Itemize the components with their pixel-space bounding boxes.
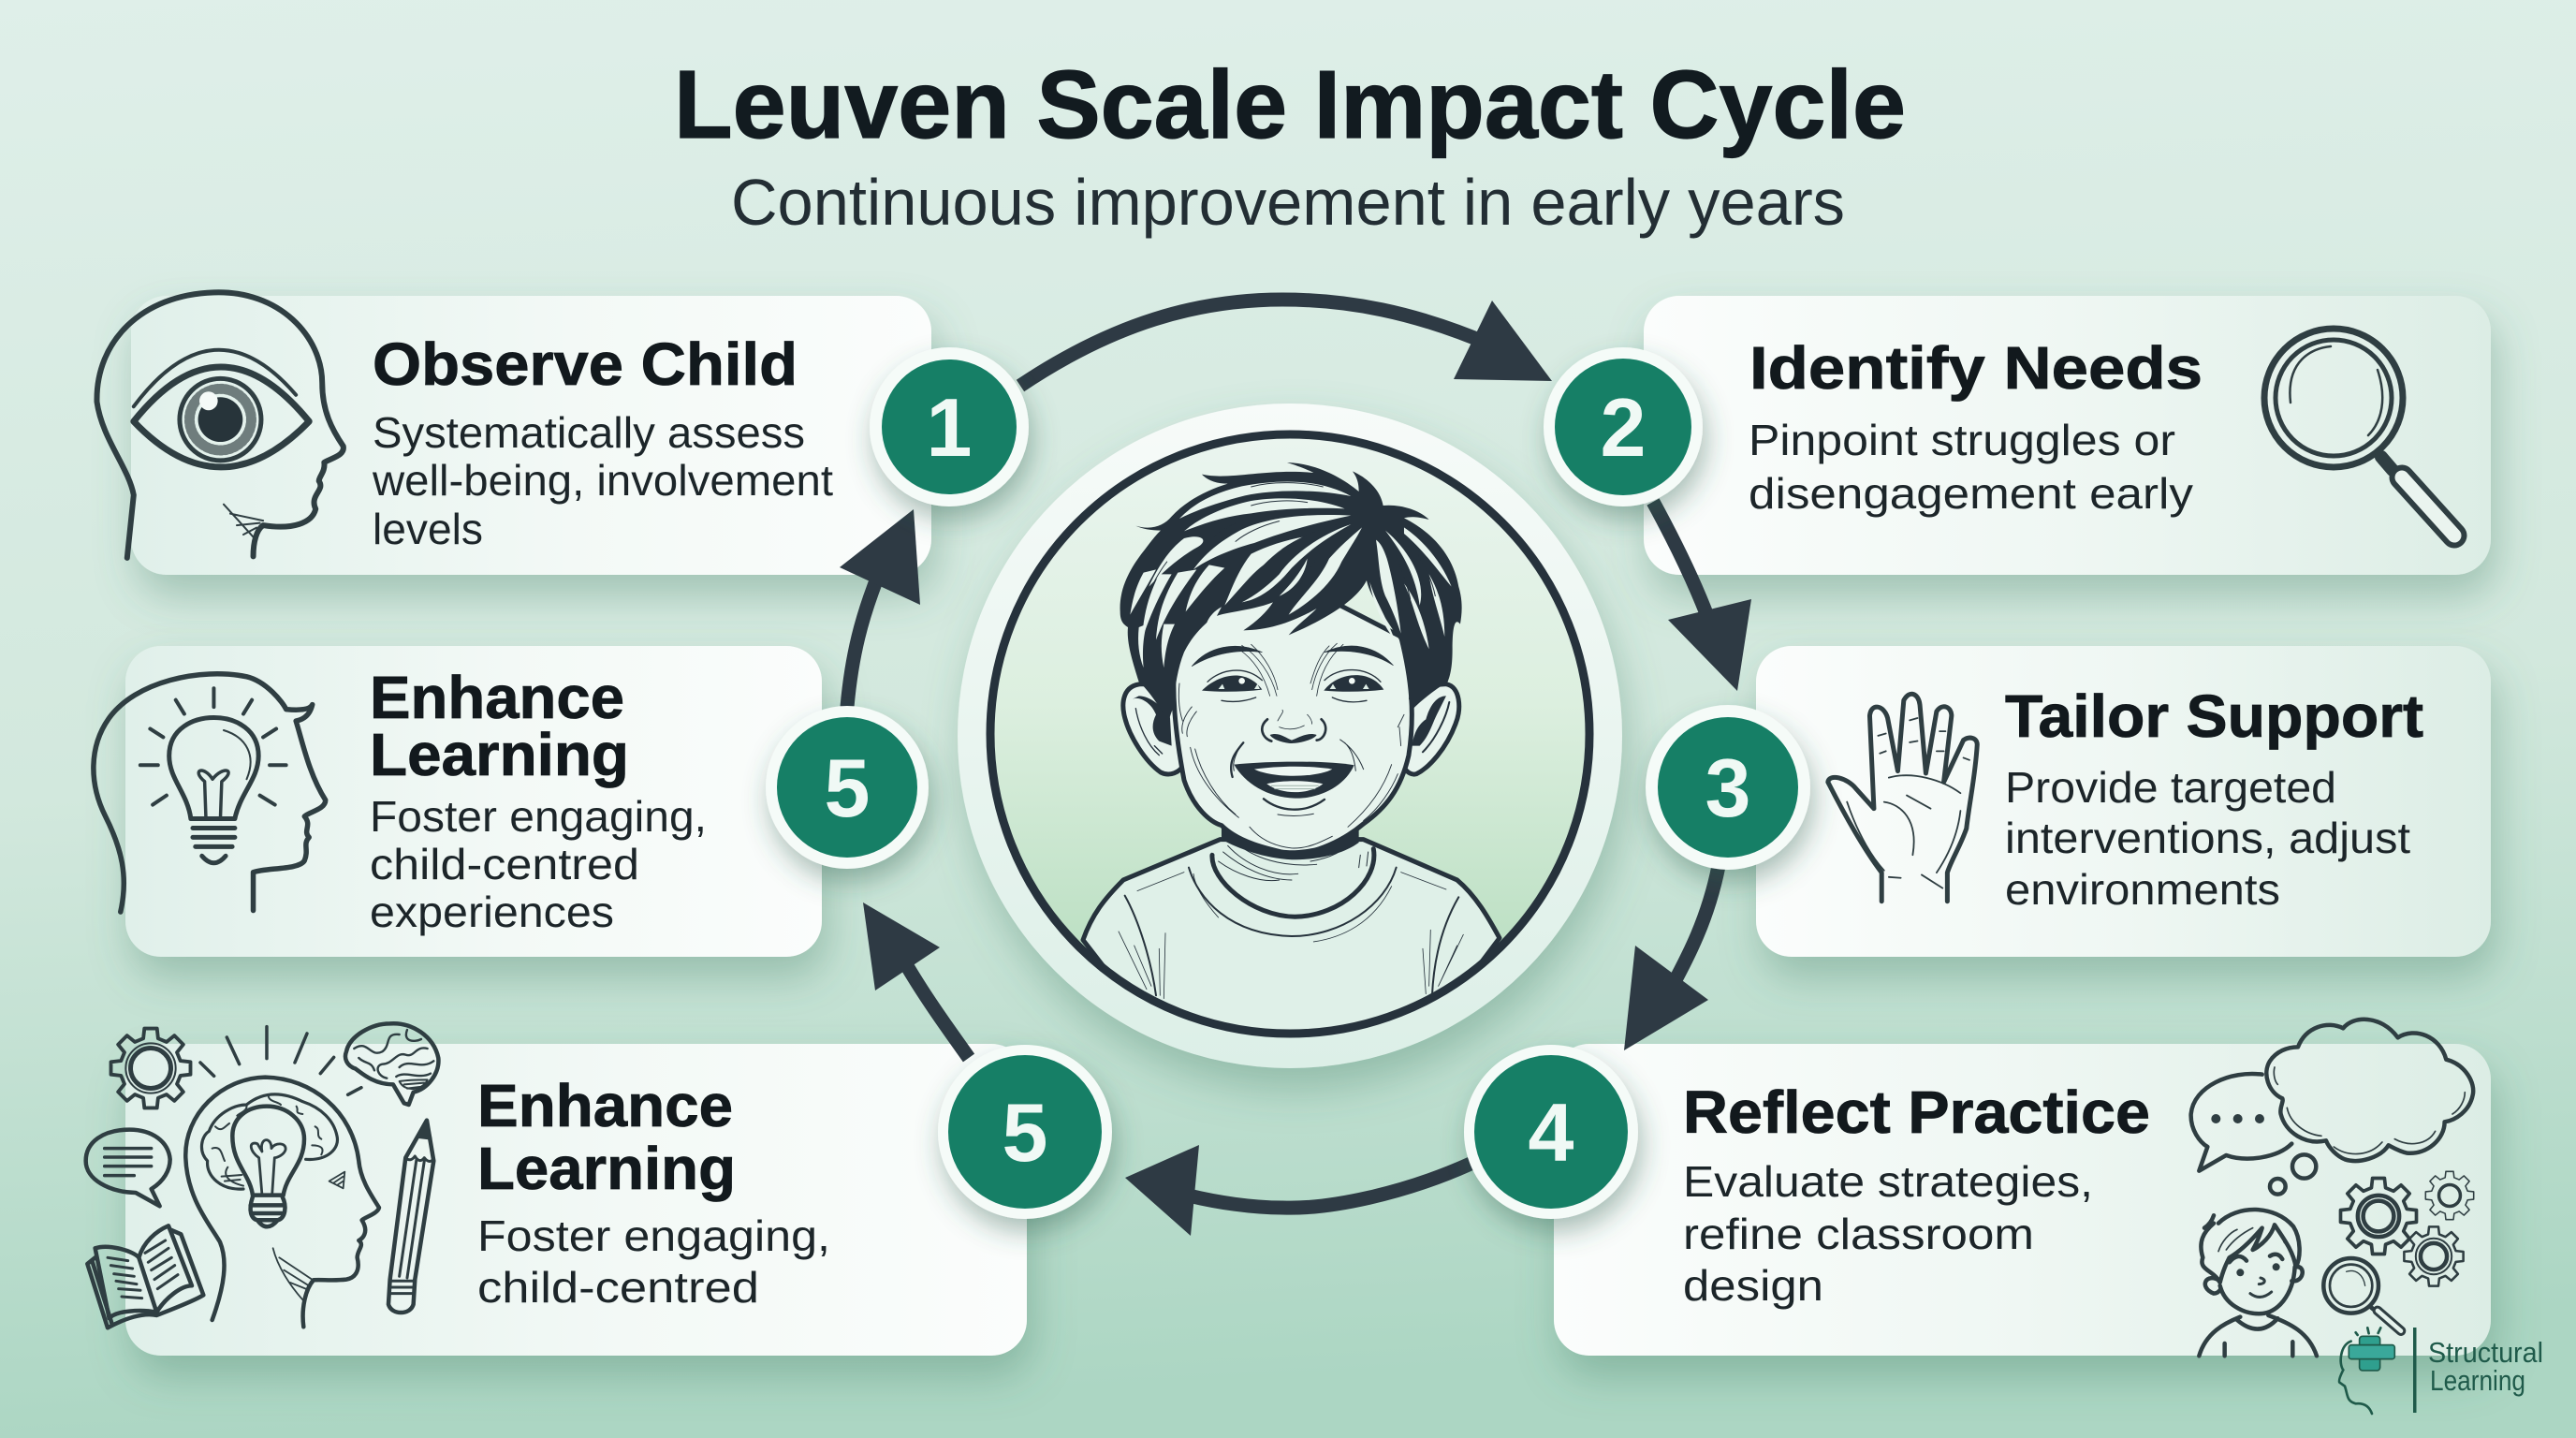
icon: thought cloud [2266, 1020, 2473, 1161]
panel: observe child [96, 292, 931, 575]
body: identify needs [1749, 416, 2193, 518]
body: identify needs: Pinpoint struggles or [1749, 416, 2175, 464]
heading: enhance learning: Enhance [370, 664, 624, 731]
badge 5 lower: 5 [1003, 1086, 1047, 1179]
icon: speech bubble [86, 1130, 170, 1206]
icon: pencil [388, 1121, 433, 1313]
body: observe child: levels [373, 505, 483, 553]
arrow: lower 5 to upper 5 [863, 902, 969, 1058]
badge 5 lower [938, 1045, 1112, 1219]
hair [1120, 462, 1462, 724]
icon: gear [111, 1029, 190, 1108]
body: enhance learning [370, 792, 707, 936]
body: enhance learning: child-centred [370, 840, 639, 888]
panel: enhance learning lower [86, 1023, 1027, 1356]
icon: bulb [232, 1107, 304, 1196]
icon: light rays [200, 1027, 361, 1094]
illustration: smiling child [1083, 462, 1500, 1049]
body: reflect practice [1683, 1157, 2093, 1310]
logo mark [2339, 1328, 2394, 1414]
body: identify needs: disengagement early [1749, 469, 2193, 518]
hair highlights [1130, 481, 1452, 668]
heading: enhance learning lower: Learning [477, 1135, 736, 1202]
panel: enhance learning upper [94, 646, 822, 957]
logo text: Structural [2428, 1336, 2543, 1369]
icon: open book [95, 1225, 192, 1318]
heading: observe child: Observe Child [373, 330, 798, 398]
heading: reflect practice: Reflect Practice [1683, 1078, 2150, 1146]
icon: learning cluster [86, 1023, 438, 1328]
ears [1123, 684, 1459, 774]
central portrait [958, 404, 1622, 1068]
icon: open hand [1828, 694, 1977, 902]
icon: gears [2340, 1171, 2474, 1286]
icon: magnifying glass [2264, 329, 2454, 536]
body: enhance learning lower: child-centred [477, 1263, 759, 1312]
portrait ring [990, 434, 1589, 1034]
child body [1083, 836, 1500, 1049]
badge 2 [1544, 347, 1703, 506]
panel: reflect practice [1554, 1020, 2491, 1356]
badge 5 upper: 5 [825, 741, 870, 834]
arrow: step 3 to 4 [1624, 866, 1719, 1050]
title: Leuven Scale Impact Cycle [674, 51, 1906, 158]
badge 4: 4 [1529, 1086, 1574, 1179]
icon: profile head [185, 1078, 379, 1327]
mouth [1234, 762, 1354, 799]
arrow: step 2 to 3 [1653, 502, 1751, 691]
heading: tailor support: Tailor Support [2005, 682, 2423, 750]
eyes [1202, 675, 1262, 692]
heading: enhance learning lower [477, 1072, 736, 1202]
logo: structural learning [2339, 1328, 2543, 1414]
badge 4 [1464, 1045, 1638, 1219]
body: reflect practice: Evaluate strategies, [1683, 1157, 2093, 1206]
body: tailor support: environments [2005, 865, 2280, 914]
icon: speech bubble [2191, 1074, 2291, 1171]
logo text [2428, 1336, 2543, 1397]
body: observe child: well-being, involvement [372, 456, 833, 505]
eyebrows [1192, 646, 1393, 667]
badge 3 [1646, 705, 1810, 870]
panel: identify needs [1644, 296, 2491, 575]
shirt [1083, 840, 1500, 1049]
body: reflect practice: refine classroom [1683, 1210, 2034, 1258]
body: observe child: Systematically assess [373, 408, 805, 457]
icon: magnifier [2323, 1258, 2378, 1313]
body: enhance learning lower: Foster engaging, [477, 1211, 830, 1260]
icon: brain arc [201, 1094, 337, 1189]
body: tailor support: Provide targeted [2005, 763, 2336, 812]
logo text: Learning [2430, 1364, 2525, 1397]
badge 5 upper [766, 706, 929, 869]
arrow: step 1 to 2 [1020, 300, 1552, 386]
badge 2: 2 [1601, 381, 1646, 474]
nose [1262, 719, 1325, 741]
badge 3: 3 [1705, 741, 1750, 834]
body: tailor support [2005, 763, 2410, 914]
icon: brain [345, 1023, 438, 1105]
badge 1 [870, 347, 1029, 506]
heading: enhance learning: Learning [370, 721, 629, 788]
body: enhance learning: experiences [370, 888, 614, 936]
heading: enhance learning lower: Enhance [477, 1072, 733, 1139]
subtitle: Continuous improvement in early years [731, 166, 1845, 239]
body: observe child [372, 408, 833, 553]
badge 1: 1 [927, 381, 972, 474]
heading: enhance learning [370, 664, 629, 788]
arrow: step 5 to 1 [840, 509, 920, 707]
panel: tailor support [1756, 646, 2491, 957]
heading: identify needs: Identify Needs [1749, 334, 2203, 402]
body: enhance learning: Foster engaging, [370, 792, 707, 841]
icon: reflection cluster [2191, 1020, 2474, 1356]
body: reflect practice: design [1683, 1261, 1823, 1310]
arrow: step 4 to 5 [1125, 1145, 1471, 1236]
body: enhance learning lower [477, 1211, 830, 1312]
icon: head with eye [96, 292, 344, 558]
body: tailor support: interventions, adjust [2005, 814, 2410, 862]
face [1120, 462, 1462, 859]
icon: small child [2220, 1267, 2295, 1313]
icon: head with light bulb [94, 674, 326, 912]
